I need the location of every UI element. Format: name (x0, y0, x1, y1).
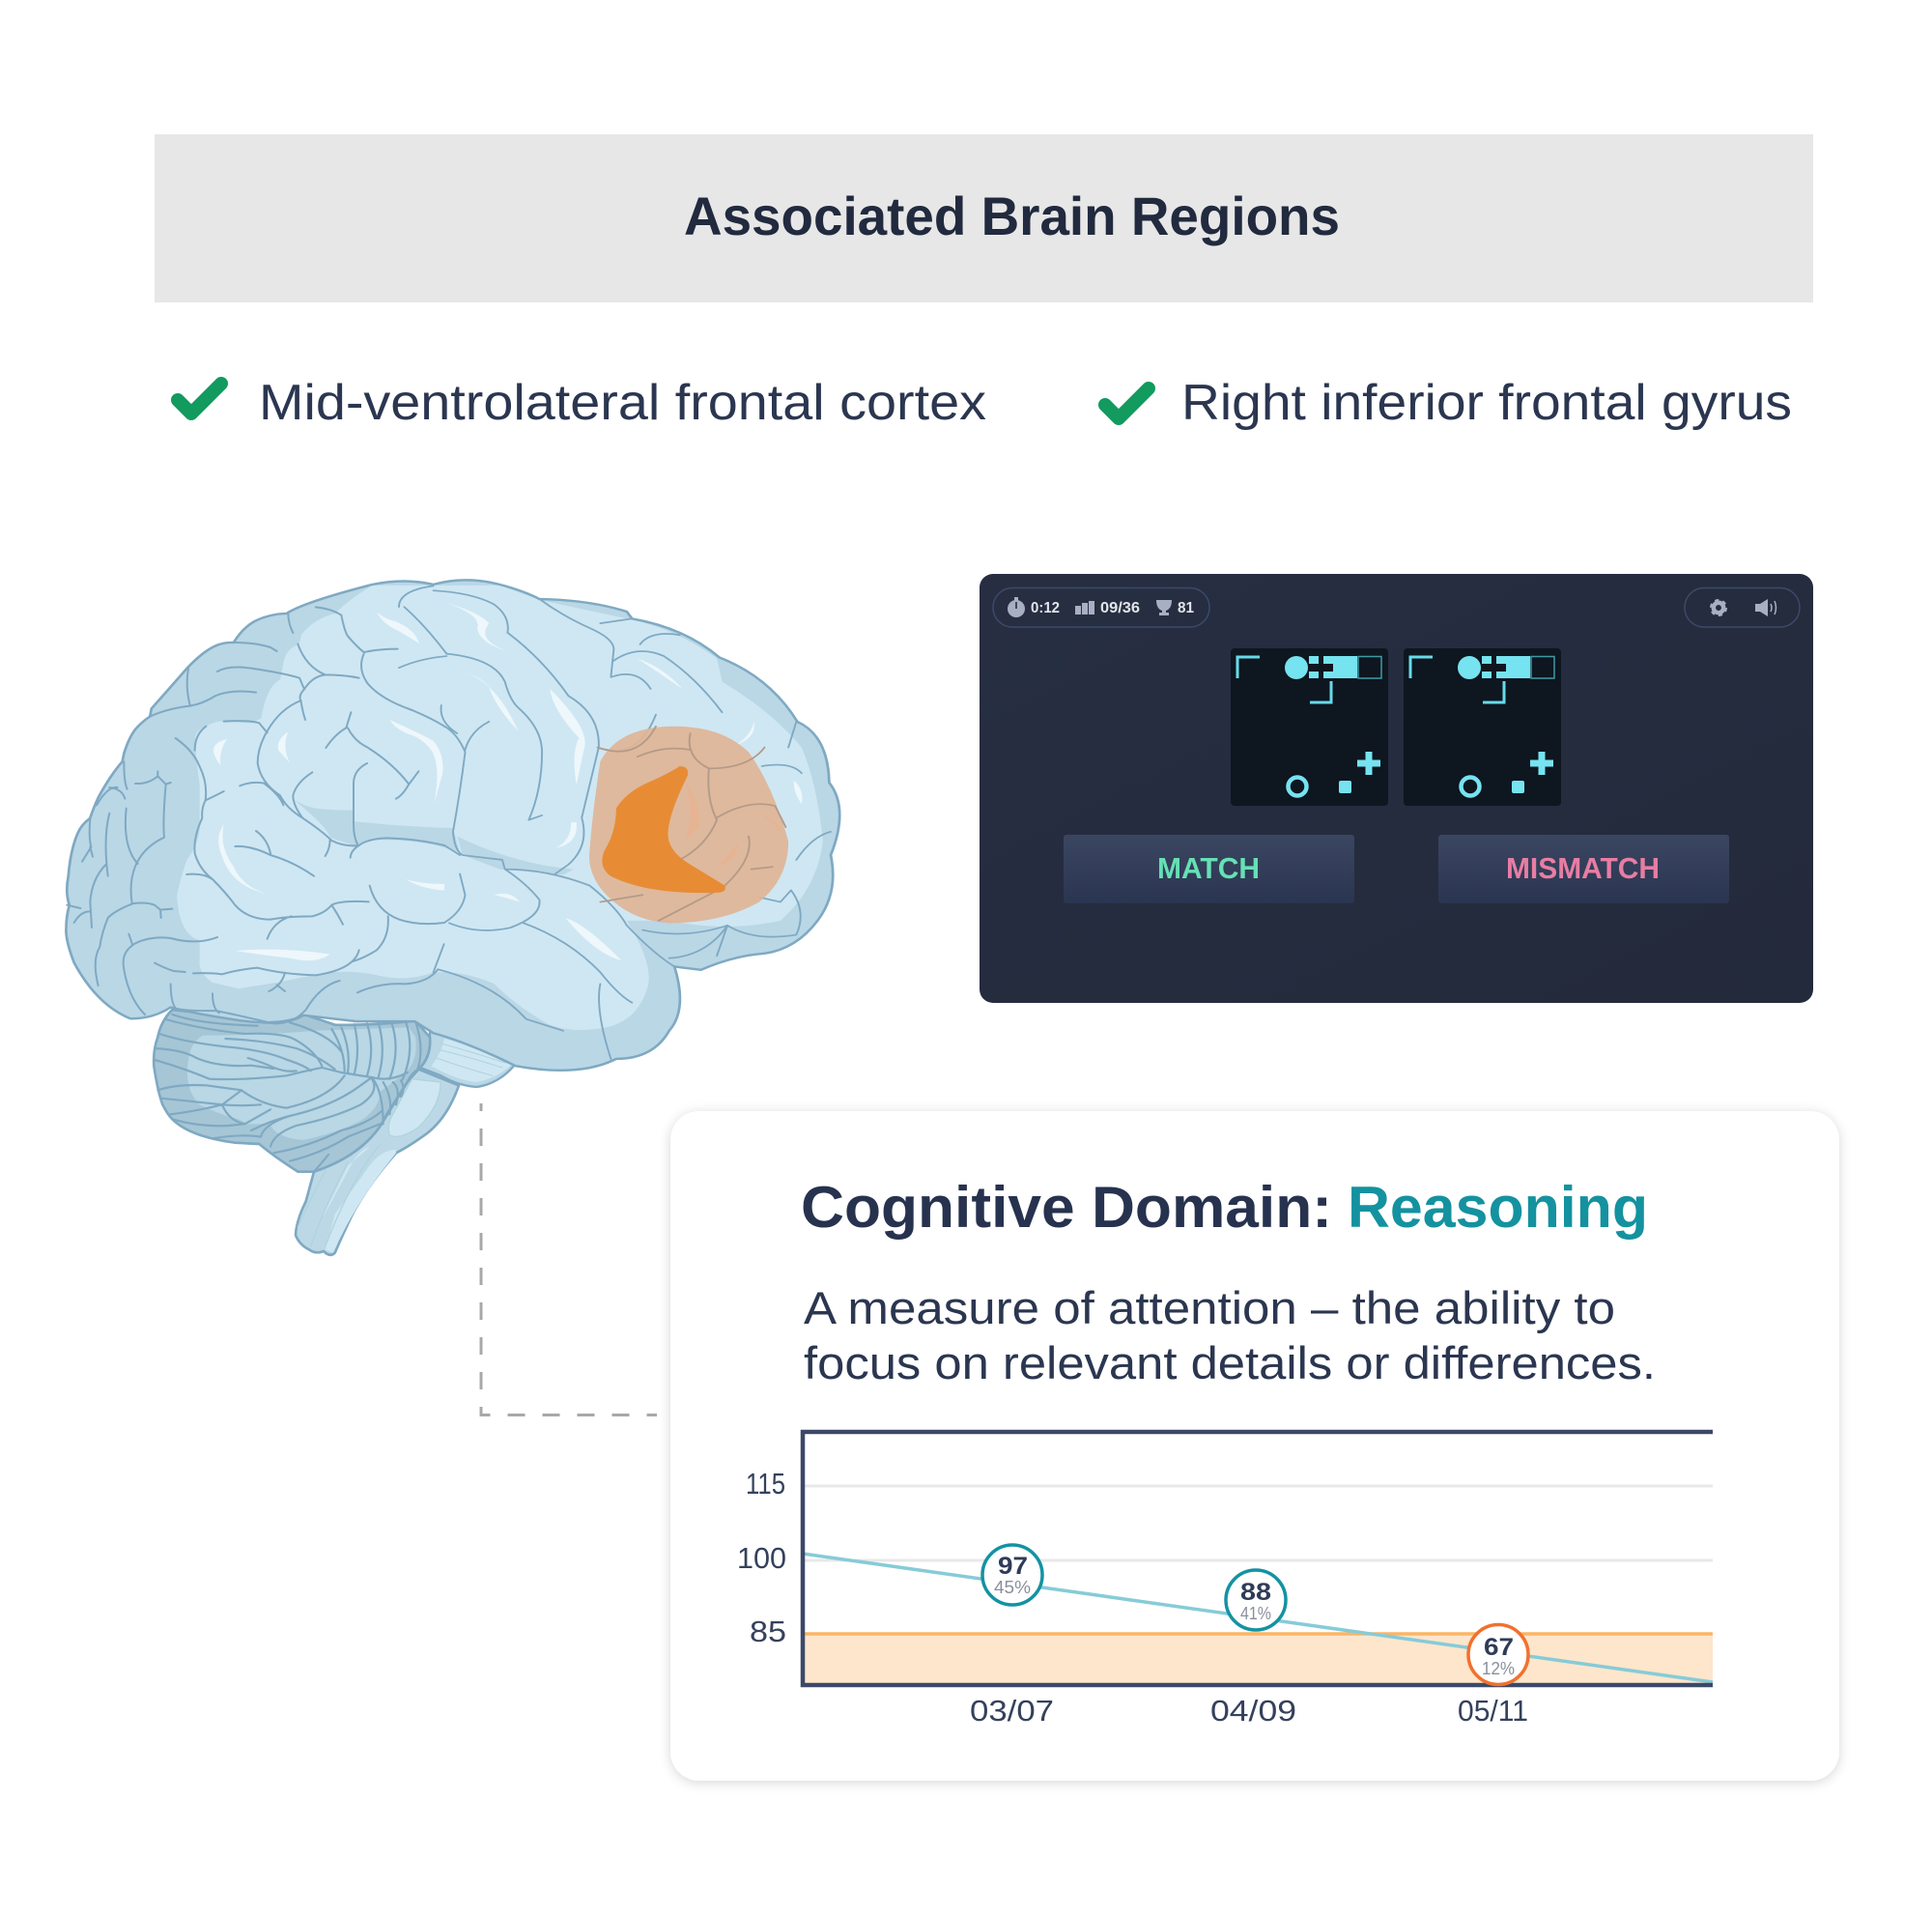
data point 88: 88 (1240, 1579, 1271, 1606)
brain stem (296, 1070, 459, 1255)
pons (420, 1031, 515, 1087)
highlights right (444, 602, 802, 960)
y axis labels (737, 1467, 786, 1648)
settings pill (1685, 587, 1800, 627)
icon: stopwatch (1008, 597, 1025, 617)
brain illustration (66, 580, 839, 1255)
y axis labels: 115 (746, 1467, 785, 1501)
dashed connector (481, 1103, 657, 1415)
data point 67: 67 (1484, 1634, 1514, 1661)
button: match: MATCH (1157, 851, 1260, 885)
card title (801, 1175, 1648, 1240)
y axis labels: 100 (737, 1541, 786, 1575)
status pill (993, 587, 1209, 627)
button: match (1064, 835, 1354, 903)
button: mismatch: MISMATCH (1506, 851, 1660, 885)
icon: bars (1075, 601, 1094, 615)
orange core (602, 766, 725, 893)
sulci right (399, 586, 831, 1059)
cerebrum left lobes (67, 607, 444, 1023)
card description: focus on relevant details or differences. (804, 1337, 1656, 1388)
x axis labels: 03/07 (970, 1694, 1054, 1728)
heading: Associated Brain Regions: Associated Brain Regions (684, 186, 1340, 246)
data point 97: 97 (998, 1553, 1028, 1580)
list item: mid-ventrolateral frontal cortex: Mid-ventrolateral frontal cortex (259, 375, 986, 431)
data point 67 (1468, 1625, 1528, 1685)
card description: A measure of attention – the ability to (804, 1282, 1615, 1333)
icon: speaker (1755, 599, 1776, 616)
halo detail: sulci and highlights (598, 727, 785, 921)
line chart (737, 1432, 1713, 1728)
status pill: 09/36 (1100, 600, 1140, 616)
x axis labels (970, 1694, 1528, 1728)
data point 97 (982, 1545, 1042, 1605)
stimulus tile left (1231, 648, 1388, 806)
highlighted region (589, 727, 788, 923)
list item: right inferior frontal gyrus: Right inferior frontal gyrus (1181, 375, 1792, 431)
button: mismatch (1438, 835, 1729, 903)
status pill: 0:12 (1031, 600, 1060, 616)
data point 67: 12% (1482, 1659, 1515, 1678)
cerebrum outline (66, 580, 839, 1071)
light cortex surface (177, 586, 823, 1030)
stimulus tile right (1404, 648, 1561, 806)
icon: green check (1105, 388, 1149, 418)
data point 88 (1226, 1570, 1286, 1630)
data point 88: 41% (1240, 1604, 1271, 1623)
cerebellum (154, 1010, 430, 1172)
icon: green check (178, 384, 221, 414)
cerebrum (66, 580, 839, 1071)
sulci left (67, 607, 444, 1023)
halo: mid-ventrolateral area (589, 727, 788, 923)
panel: game screenshot (980, 574, 1813, 1003)
card title: Reasoning (1348, 1175, 1648, 1240)
highlights left (213, 612, 444, 960)
status pill: 81 (1178, 600, 1194, 616)
panel: cognitive domain card (670, 1111, 1839, 1781)
card description (804, 1282, 1656, 1388)
y axis labels: 85 (750, 1615, 786, 1648)
header banner (155, 134, 1813, 302)
x axis labels: 04/09 (1210, 1694, 1296, 1728)
sulcus shadows (293, 799, 574, 874)
icon: gear (1712, 601, 1725, 615)
card title: Cognitive Domain: (801, 1175, 1332, 1240)
icon: trophy (1156, 600, 1172, 615)
data point 97: 45% (994, 1578, 1031, 1597)
x axis labels: 05/11 (1458, 1694, 1528, 1728)
